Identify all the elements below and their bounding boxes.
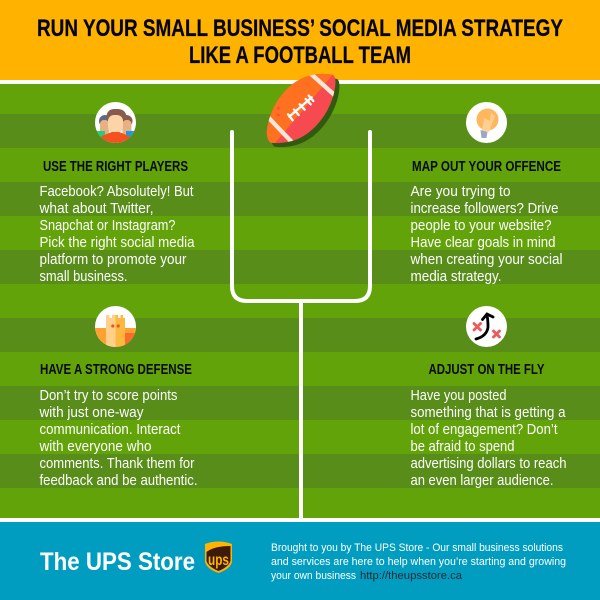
icon: football bbox=[263, 72, 339, 147]
panel: adjust on the fly: Have you posted bbox=[410, 388, 506, 404]
panel: use the right players: platform to promote your bbox=[40, 252, 187, 268]
panel: use the right players: Pick the right social media bbox=[40, 235, 195, 251]
panel: map out your offence: when creating your social bbox=[410, 252, 562, 268]
footer text: Brought to you by The UPS Store - Our small business solutions bbox=[271, 542, 563, 554]
footer text: your own business bbox=[271, 570, 356, 582]
panel: have a strong defense: with everyone who bbox=[39, 439, 151, 455]
icon: UPS shield bbox=[205, 542, 232, 573]
panel: adjust on the fly: be afraid to spend bbox=[410, 439, 514, 455]
panel: adjust on the fly: something that is getting a bbox=[410, 405, 566, 421]
panel: have a strong defense: communication. Interact bbox=[40, 422, 180, 438]
title banner: LIKE A FOOTBALL TEAM bbox=[189, 42, 411, 69]
panel: use the right players: Facebook? Absolutely! But bbox=[40, 184, 194, 200]
panel: have a strong defense: with just one-way bbox=[39, 405, 144, 421]
footer bbox=[0, 522, 600, 600]
panel: adjust on the fly: lot of engagement? Don’t bbox=[410, 422, 558, 438]
panel: map out your offence bbox=[410, 159, 562, 285]
panel: map out your offence: people to your website? bbox=[410, 218, 552, 234]
icon: UPS shield: ups bbox=[208, 552, 229, 569]
panel: have a strong defense: HAVE A STRONG DEFENSE bbox=[40, 362, 192, 378]
footer text: and services are here to help when you’re starting and growing bbox=[271, 556, 566, 568]
panel: adjust on the fly bbox=[410, 362, 566, 489]
panel: use the right players: USE THE RIGHT PLAYERS bbox=[43, 159, 188, 175]
football field bbox=[0, 84, 600, 518]
panel: map out your offence: Have clear goals in mind bbox=[410, 235, 556, 251]
panel: map out your offence: MAP OUT YOUR OFFENCE bbox=[412, 159, 561, 175]
panel: adjust on the fly: advertising dollars to reach bbox=[410, 456, 566, 472]
icon: play diagram bbox=[466, 306, 507, 347]
panel: adjust on the fly: an even larger audience. bbox=[410, 473, 554, 489]
goal post bbox=[232, 132, 370, 518]
panel: use the right players: small business. bbox=[40, 269, 128, 285]
panel: use the right players: Snapchat or Instagram? bbox=[40, 218, 176, 234]
panel: adjust on the fly: ADJUST ON THE FLY bbox=[428, 362, 545, 378]
icon: castle bbox=[95, 306, 136, 347]
footer text bbox=[271, 542, 566, 582]
icon: light bulb bbox=[466, 102, 507, 143]
panel: map out your offence: increase followers? Drive bbox=[410, 201, 558, 217]
panel: use the right players: what about Twitter, bbox=[39, 201, 154, 217]
footer text: http://theupsstore.ca bbox=[360, 570, 463, 582]
panel: have a strong defense: Don’t try to score points bbox=[40, 388, 178, 404]
panel: map out your offence: Are you trying to bbox=[410, 184, 510, 200]
title banner bbox=[0, 0, 600, 80]
panel: map out your offence: media strategy. bbox=[410, 269, 502, 285]
panel: have a strong defense bbox=[39, 362, 197, 489]
icon: players bbox=[94, 102, 137, 145]
brand name: The UPS Store bbox=[40, 548, 195, 576]
panel: have a strong defense: feedback and be authentic. bbox=[40, 473, 198, 489]
panel: use the right players bbox=[39, 159, 195, 285]
panel: have a strong defense: comments. Thank them for bbox=[40, 456, 195, 472]
